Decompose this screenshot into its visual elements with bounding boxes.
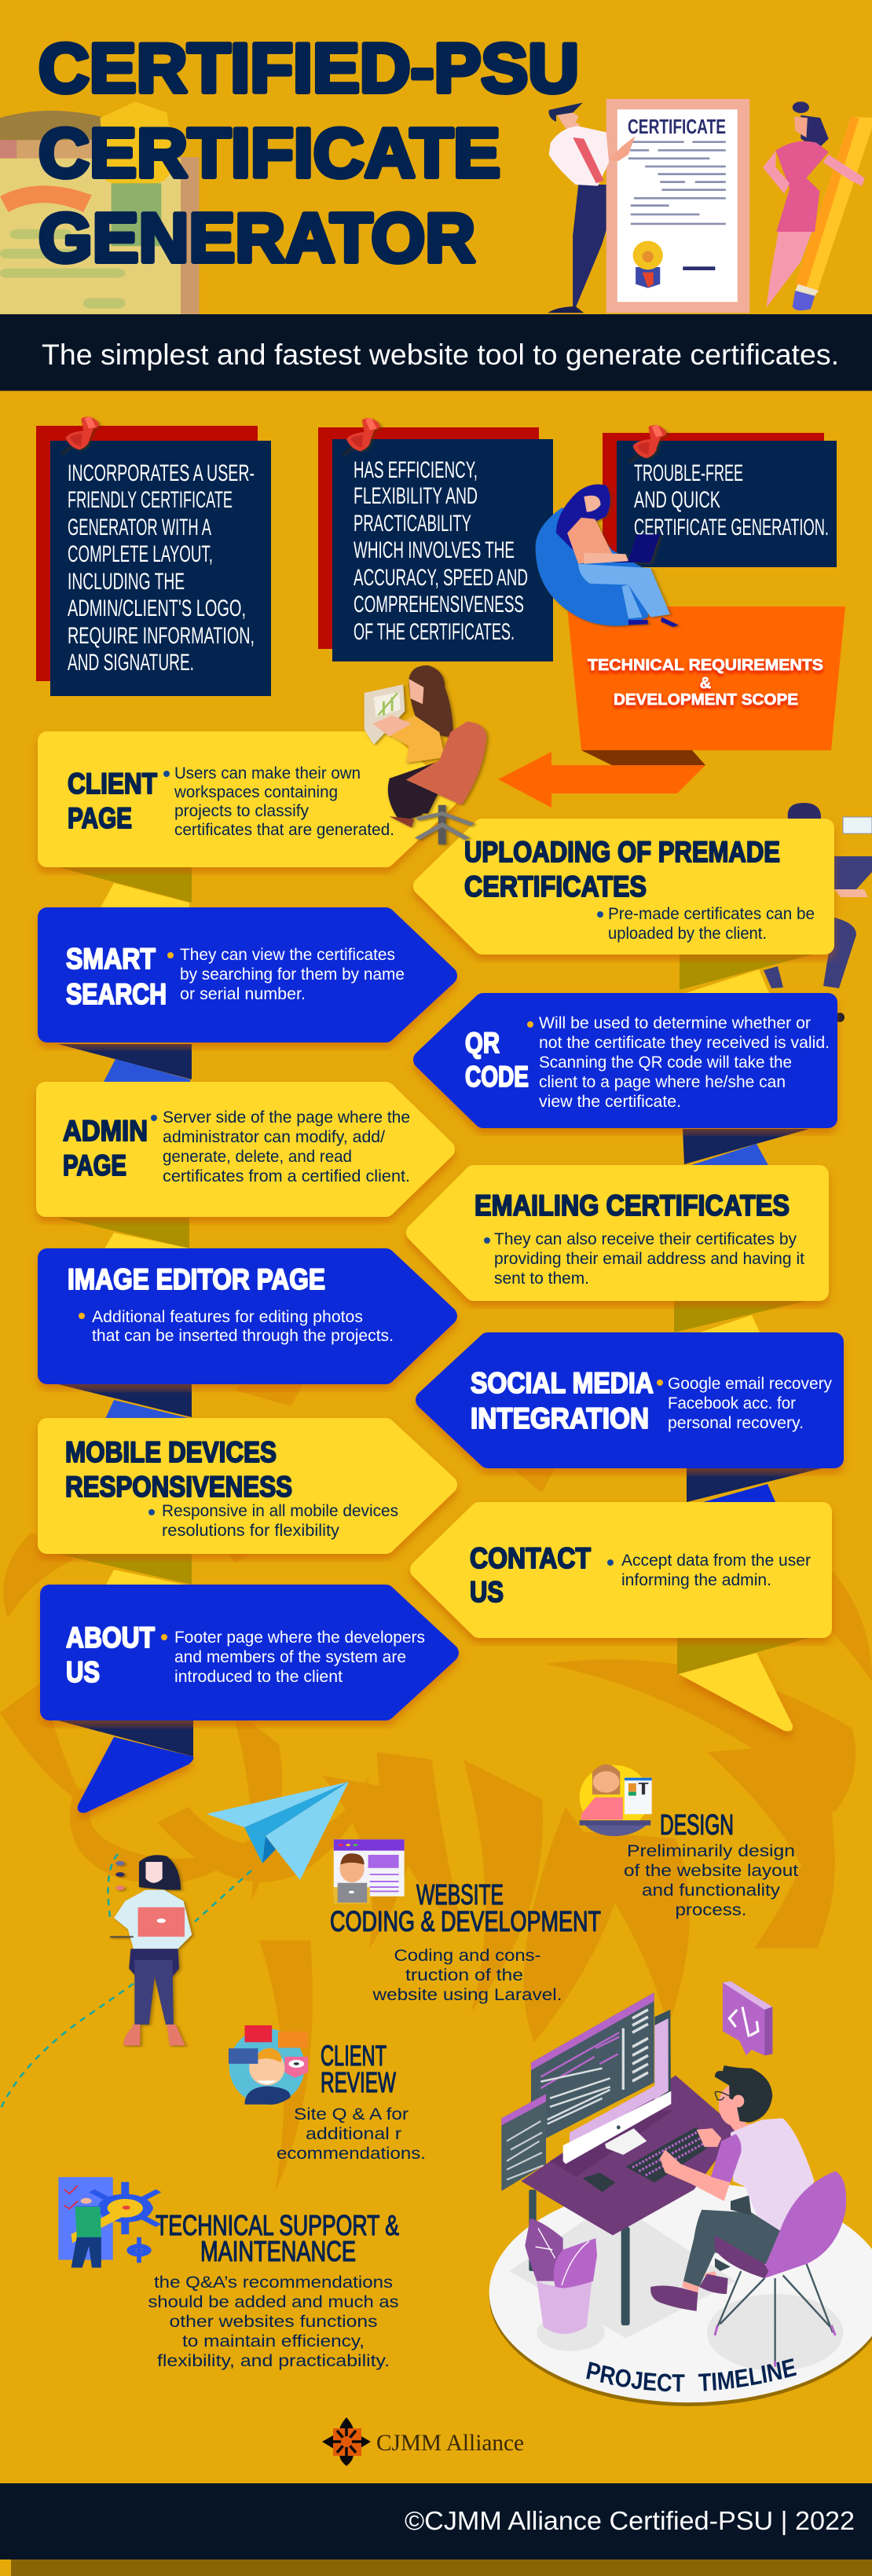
footer band: ©CJMM Alliance Certified-PSU | 2022 xyxy=(405,2506,855,2535)
website description: Coding and cons- xyxy=(394,1947,541,1965)
panel: qr code: not the certificate they received is valid. xyxy=(539,1034,830,1052)
icon: woman with pencil xyxy=(763,101,872,310)
panel: about us: Footer page where the developers xyxy=(174,1629,425,1647)
panel: contact us: CONTACT xyxy=(470,1542,591,1574)
panel: qr code: view the certificate. xyxy=(539,1093,681,1111)
panel: client page: PAGE xyxy=(68,802,132,834)
icon: woman with laptop xyxy=(110,1855,192,2046)
design description xyxy=(624,1842,798,1919)
panel: emailing certificates xyxy=(416,1174,819,1292)
panel: contact us xyxy=(420,1512,823,1629)
panel: uploading of premade certificates: UPLOADING OF PREMADE xyxy=(464,836,780,868)
website description: truction of the xyxy=(405,1966,523,1984)
panel: feature card 2: PRACTICABILITY xyxy=(354,511,471,537)
technical support heading xyxy=(156,2209,399,2267)
panel: admin page xyxy=(46,1091,445,1207)
panel: feature card 1: COMPLETE LAYOUT, xyxy=(68,541,213,567)
panel: uploading of premade certificates xyxy=(423,828,825,945)
panel: feature card 2: OF THE CERTIFICATES. xyxy=(354,619,515,645)
design description: Preliminarily design xyxy=(627,1842,795,1860)
panel: qr code: Scanning the QR code will take the xyxy=(539,1053,792,1072)
panel: image editor page: that can be inserted through the projects. xyxy=(92,1327,394,1345)
client review description: Site Q & A for xyxy=(294,2105,409,2123)
website heading: CODING & DEVELOPMENT xyxy=(330,1905,601,1937)
technical support heading: MAINTENANCE xyxy=(200,2235,356,2267)
panel: smart search xyxy=(47,917,448,1033)
title: CERTIFIED-PSU xyxy=(38,29,579,107)
panel: client page: CLIENT xyxy=(68,768,157,800)
panel: about us: introduced to the client xyxy=(174,1668,343,1686)
website description xyxy=(372,1947,562,2004)
panel: admin page: certificates from a certified client. xyxy=(163,1167,410,1185)
panel: feature card 2: COMPREHENSIVENESS xyxy=(354,592,524,617)
website heading: WEBSITE xyxy=(416,1878,504,1911)
icon: person behind upload panel xyxy=(764,803,872,1022)
panel: contact us: Accept data from the user xyxy=(621,1552,811,1570)
panel: smart search: SEARCH xyxy=(66,978,167,1010)
panel: contact us: US xyxy=(470,1576,504,1608)
panel: mobile devices responsiveness: resolutions for flexibility xyxy=(162,1522,340,1540)
title: CERTIFICATE xyxy=(38,114,500,192)
panel: mobile devices responsiveness xyxy=(47,1427,448,1545)
design description: and functionality xyxy=(642,1882,781,1900)
panel: about us xyxy=(49,1594,449,1711)
design heading: DESIGN xyxy=(660,1808,734,1841)
panel: social media integration: personal recovery. xyxy=(668,1414,804,1432)
icon: pin 2 xyxy=(342,418,379,456)
panel: social media integration: SOCIAL MEDIA xyxy=(471,1367,654,1399)
icon: client review xyxy=(229,2025,308,2105)
panel: feature card 2: ACCURACY, SPEED AND xyxy=(354,565,528,591)
icon: man presenter xyxy=(548,103,635,313)
icon: pin 1 xyxy=(61,416,99,454)
panel: qr code: CODE xyxy=(465,1061,529,1093)
icon: paper plane xyxy=(207,1782,349,1880)
panel: feature card 3 xyxy=(603,433,837,567)
panel: feature card 1: GENERATOR WITH A xyxy=(68,515,211,540)
panel: feature card 1 xyxy=(36,426,271,696)
technical support heading: TECHNICAL SUPPORT & xyxy=(156,2209,399,2241)
client review description: ecommendations. xyxy=(277,2145,426,2163)
panel: mobile devices responsiveness: RESPONSIVENESS xyxy=(65,1471,292,1503)
website description: website using Laravel. xyxy=(372,1986,562,2004)
panel: admin page: ADMIN xyxy=(63,1115,148,1147)
panel: smart search: or serial number. xyxy=(180,985,306,1003)
panel: technical requirements banner: DEVELOPMENT SCOPE xyxy=(614,691,798,709)
panel: about us: and members of the system are xyxy=(174,1648,406,1666)
panel: image editor page: IMAGE EDITOR PAGE xyxy=(68,1263,325,1295)
design description: of the website layout xyxy=(624,1862,798,1880)
panel: uploading of premade certificates: CERTIFICATES xyxy=(464,870,647,903)
illustration: developer at desk on platform xyxy=(489,1981,872,2406)
panel: feature card 3: TROUBLE-FREE xyxy=(634,460,743,486)
technical support description: should be added and much as xyxy=(148,2293,399,2311)
panel: emailing certificates: They can also receive their certificates by xyxy=(494,1230,797,1248)
panel: feature card 1: REQUIRE INFORMATION, xyxy=(68,623,255,649)
panel: social media integration: INTEGRATION xyxy=(471,1402,649,1435)
panel: social media integration: Facebook acc. for xyxy=(668,1394,796,1413)
arrow xyxy=(498,752,705,808)
panel: admin page: generate, delete, and read xyxy=(163,1148,352,1166)
panel: smart search: SMART xyxy=(66,943,156,975)
panel: feature card 1: INCORPORATES A USER- xyxy=(68,460,255,486)
panel: about us: US xyxy=(66,1656,100,1688)
panel: image editor page: Additional features for editing photos xyxy=(92,1308,363,1326)
panel: feature card 1: ADMIN/CLIENT'S LOGO, xyxy=(68,595,246,621)
title: GENERATOR xyxy=(38,199,475,277)
client review heading: CLIENT xyxy=(321,2039,387,2072)
panel: uploading of premade certificates: uploaded by the client. xyxy=(608,925,767,943)
panel: mobile devices responsiveness: Responsive in all mobile devices xyxy=(162,1502,398,1520)
panel: feature card 3: AND QUICK xyxy=(634,487,720,513)
footer band xyxy=(0,2483,872,2576)
panel: client page: projects to classify xyxy=(174,802,309,820)
panel: feature card 1: FRIENDLY CERTIFICATE xyxy=(68,487,233,513)
panel: feature card 2: FLEXIBILITY AND xyxy=(354,483,478,509)
icon: design xyxy=(580,1764,652,1836)
panel: client page: workspaces containing xyxy=(174,783,338,801)
panel: technical requirements banner: & xyxy=(700,675,711,692)
icon: technical support xyxy=(58,2177,159,2267)
panel: feature card 1: AND SIGNATURE. xyxy=(68,650,194,676)
client review description xyxy=(277,2105,426,2163)
client review heading: REVIEW xyxy=(321,2066,396,2098)
icon: pin 3 xyxy=(628,425,666,463)
logo: CJMM Alliance xyxy=(376,2430,524,2456)
panel: social media integration xyxy=(425,1342,834,1459)
logo xyxy=(322,2417,524,2466)
subtitle band xyxy=(0,314,872,391)
header illustration: certificate and presenters xyxy=(548,99,872,313)
technical support description: other websites functions xyxy=(170,2313,377,2331)
panel: feature card 2: HAS EFFICIENCY, xyxy=(354,457,478,483)
panel: emailing certificates: sent to them. xyxy=(494,1270,589,1288)
website heading xyxy=(330,1878,601,1937)
panel: technical requirements banner: TECHNICAL REQUIREMENTS xyxy=(588,657,823,674)
panel: image editor page xyxy=(47,1258,448,1375)
panel: smart search: They can view the certificates xyxy=(180,946,395,964)
dashed flight path xyxy=(0,1854,251,2110)
technical support description: flexibility, and practicability. xyxy=(157,2352,390,2370)
icon: woman on office chair xyxy=(365,665,486,845)
client review heading xyxy=(321,2039,396,2098)
panel: feature card 1: INCLUDING THE xyxy=(68,569,185,595)
panel: technical requirements banner xyxy=(567,606,845,765)
panel: admin page: Server side of the page where the xyxy=(163,1108,410,1127)
panel: feature card 2: WHICH INVOLVES THE xyxy=(354,537,515,563)
panel: qr code: QR xyxy=(465,1027,500,1059)
panel: qr code xyxy=(423,1002,830,1119)
certificate heading: CERTIFICATE xyxy=(628,115,726,138)
panel: mobile devices responsiveness: MOBILE DEVICES xyxy=(65,1436,277,1468)
project timeline label: PROJECT TIMELINE xyxy=(586,2358,797,2391)
title xyxy=(38,29,579,277)
panel: client page: certificates that are generated. xyxy=(174,821,394,839)
panel: qr code: Will be used to determine whether or xyxy=(539,1014,811,1032)
panel: emailing certificates: EMAILING CERTIFICATES xyxy=(474,1189,790,1222)
panel: client page: Users can make their own xyxy=(174,764,361,782)
panel: uploading of premade certificates: Pre-made certificates can be xyxy=(608,905,815,923)
panel: admin page: administrator can modify, add/ xyxy=(163,1128,385,1146)
panel: social media integration: Google email recovery xyxy=(668,1375,832,1393)
panel: qr code: client to a page where he/she can xyxy=(539,1073,786,1091)
panel: contact us: informing the admin. xyxy=(621,1571,771,1589)
panel: smart search: by searching for them by name xyxy=(180,966,405,984)
subtitle band: The simplest and fastest website tool to generate certificates. xyxy=(42,339,839,371)
header left illustration xyxy=(0,101,199,314)
technical support description xyxy=(148,2274,399,2370)
background flame pattern xyxy=(0,1288,872,2192)
technical support description: the Q&A’s recommendations xyxy=(154,2274,393,2292)
panel: client page xyxy=(47,741,448,858)
design description: process. xyxy=(676,1901,746,1919)
panel: emailing certificates: providing their email address and having it xyxy=(494,1250,804,1268)
icon: woman on bean bag xyxy=(536,484,679,627)
panel: admin page: PAGE xyxy=(63,1149,126,1182)
ribbons xyxy=(58,867,822,1813)
panel: feature card 2 xyxy=(318,427,553,661)
icon: website coding xyxy=(334,1839,405,1904)
technical support description: to maintain efficiency, xyxy=(182,2332,365,2351)
icon: certificate xyxy=(606,99,749,313)
panel: about us: ABOUT xyxy=(66,1621,155,1654)
client review description: additional r xyxy=(306,2125,401,2143)
